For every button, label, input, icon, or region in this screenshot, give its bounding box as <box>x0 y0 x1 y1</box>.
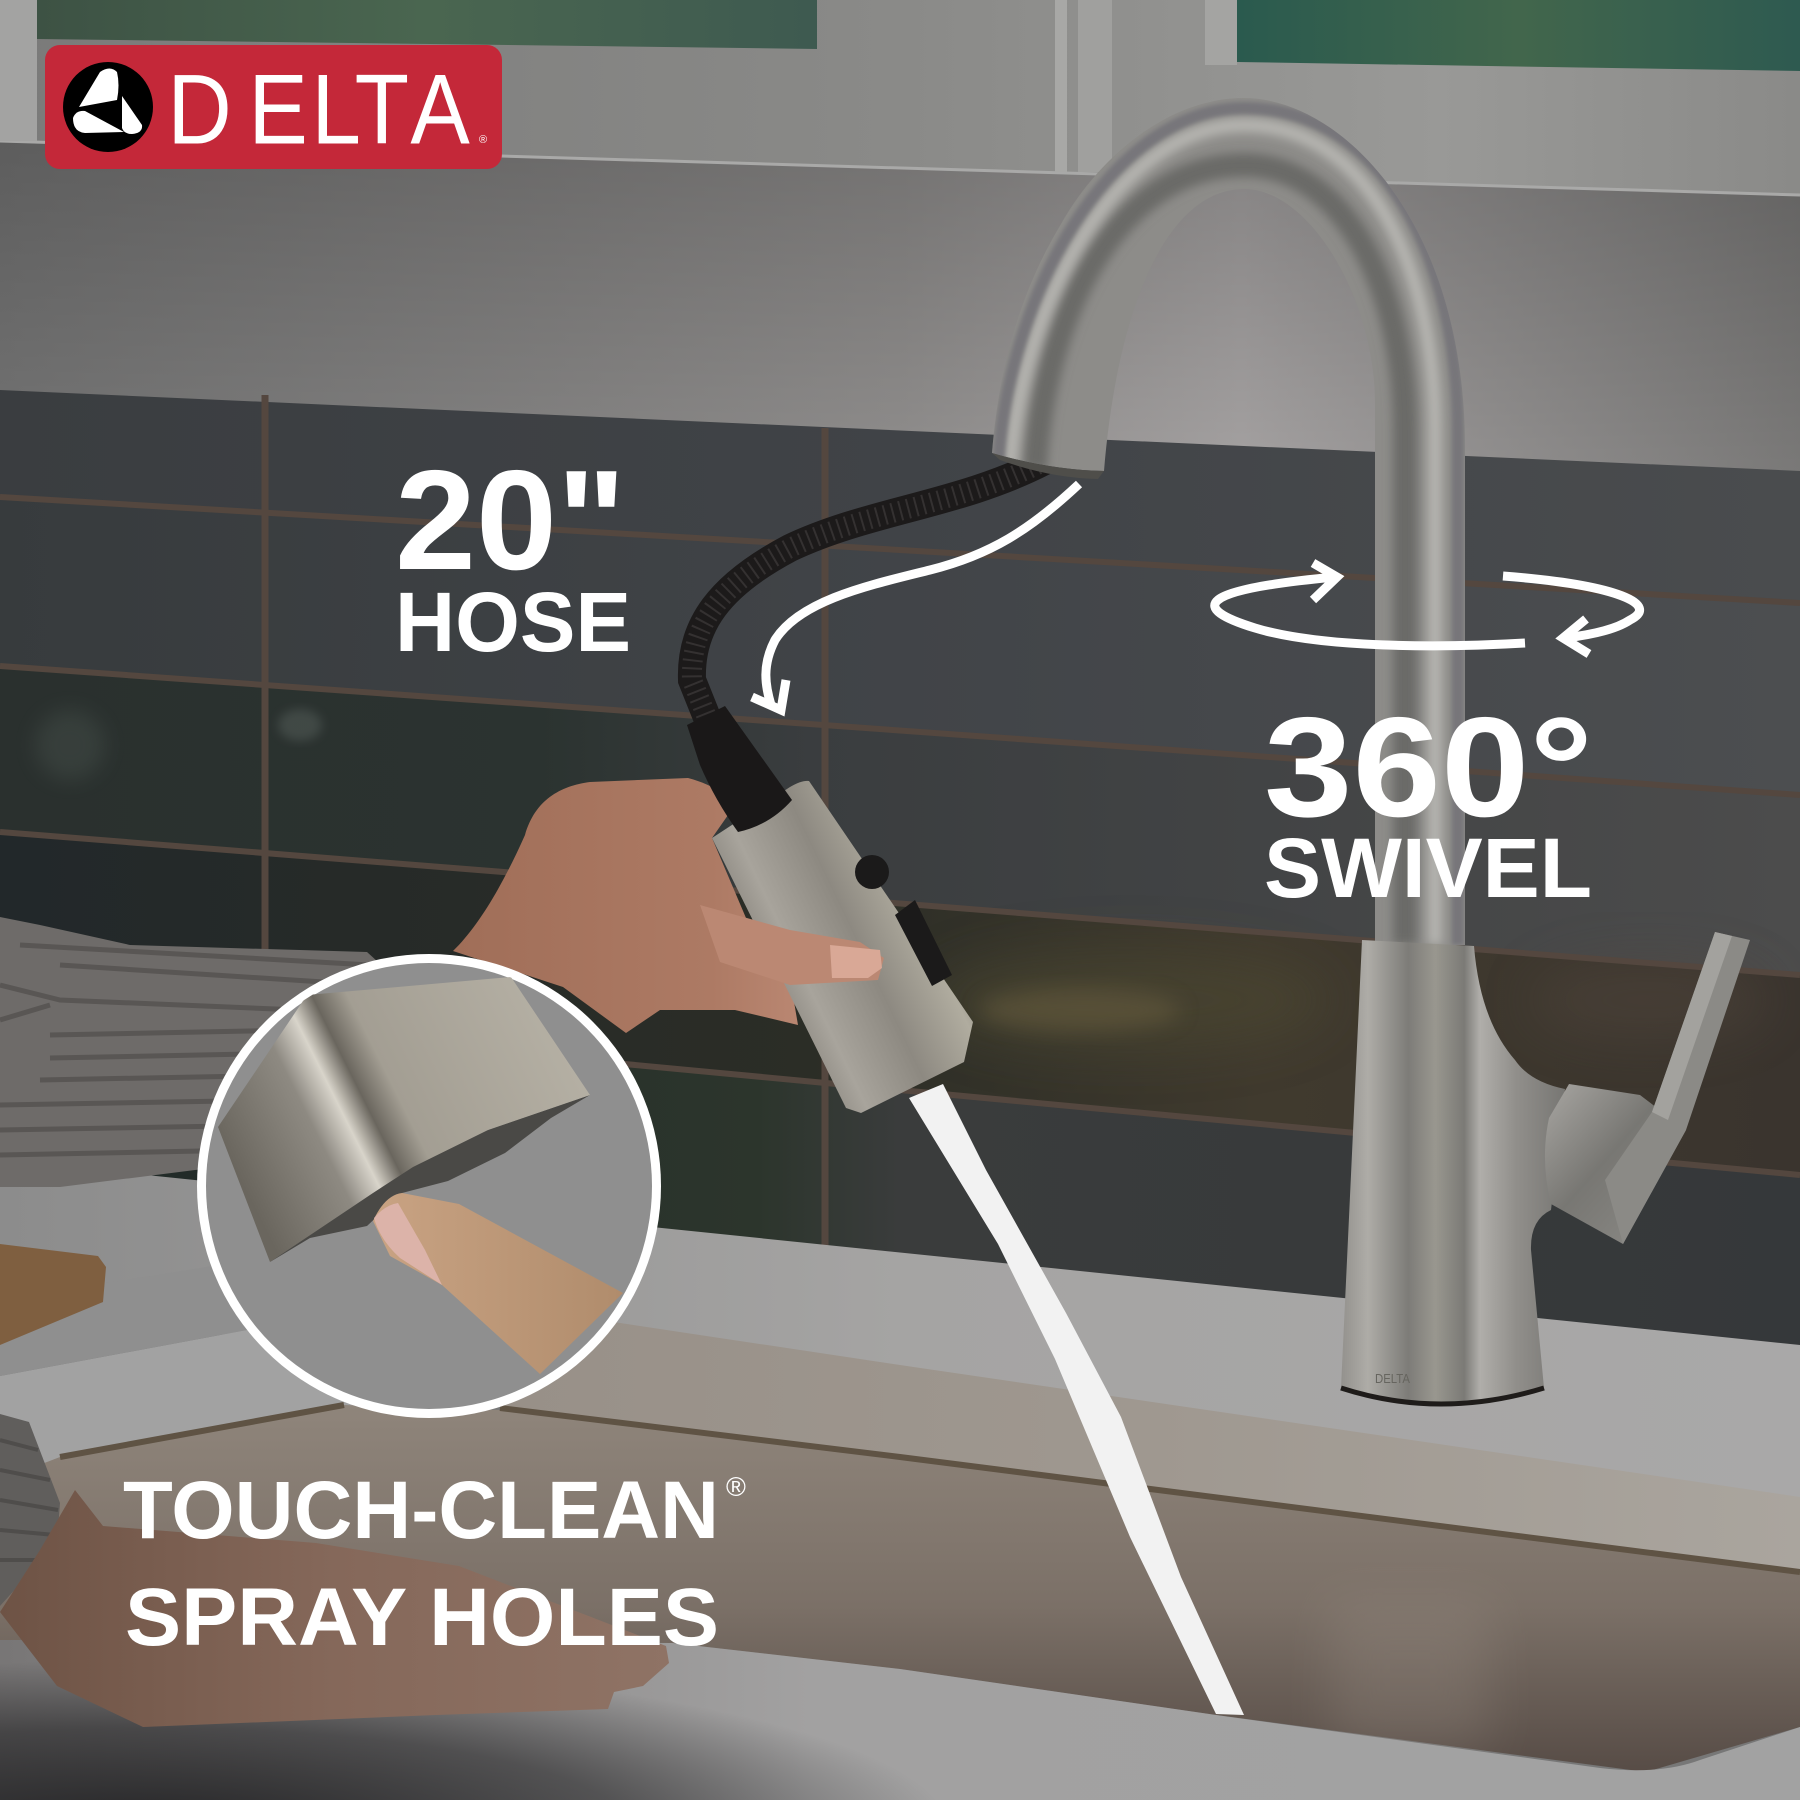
callout: 360 degree swivel <box>1264 688 1593 915</box>
inset circle: touch-clean spray holes close-up <box>197 954 661 1418</box>
water stream <box>909 1084 1244 1715</box>
fingertip <box>373 1193 623 1374</box>
faucet: lever handle <box>1545 932 1750 1244</box>
steel spray cylinder <box>218 977 590 1262</box>
callout: touch-clean spray holes: SPRAY HOLES <box>125 1572 719 1663</box>
logo: black circle with white triangle mark <box>63 62 153 152</box>
lower hand resting on sink <box>0 1490 669 1727</box>
callout: 20 inch hose: 20" <box>395 441 626 600</box>
window: left pane <box>37 0 817 49</box>
callout: 360 degree swivel: 360° <box>1264 688 1593 847</box>
spray head: hose connector <box>687 706 792 832</box>
logo: Delta red badge <box>45 45 502 169</box>
arrows: 360 degree swivel <box>1215 563 1640 654</box>
pull-down hose <box>692 461 1045 730</box>
spray head: toggle switch <box>895 900 952 986</box>
hand holding spray head <box>453 778 884 1033</box>
tile backsplash <box>0 390 1800 1350</box>
callout: touch-clean spray holes <box>123 1465 746 1663</box>
callout: 360 degree swivel: SWIVEL <box>1264 821 1592 915</box>
countertop <box>0 1160 1800 1575</box>
callout: 20 inch hose <box>395 441 631 669</box>
sweater sleeve: upper arm <box>0 917 420 1187</box>
logo: Delta red badge: ® <box>479 134 487 146</box>
engraved DELTA mark on base: DELTA <box>1375 1371 1410 1386</box>
arrow: hose pull-out path <box>752 484 1079 710</box>
fingernail <box>374 1203 442 1285</box>
callout: touch-clean spray holes: ® <box>726 1472 746 1502</box>
sink basin <box>0 1405 1800 1772</box>
background: window frame and wall <box>0 0 1800 500</box>
callout: touch-clean spray holes: TOUCH-CLEAN <box>123 1465 719 1556</box>
logo: wordmark: DELTA <box>167 54 470 165</box>
cutting board <box>0 1244 106 1345</box>
spray head <box>687 706 973 1113</box>
sweater sleeve: lower arm <box>0 1414 60 1606</box>
window: right pane <box>1237 0 1800 71</box>
index finger over spray head <box>700 905 884 985</box>
spray face <box>270 1095 590 1262</box>
spray head: round button <box>855 855 889 889</box>
faucet: base body <box>1341 940 1565 1404</box>
callout: 20 inch hose: HOSE <box>395 575 631 669</box>
front counter edge <box>0 1640 1800 1800</box>
faucet: gooseneck spout <box>992 98 1465 945</box>
